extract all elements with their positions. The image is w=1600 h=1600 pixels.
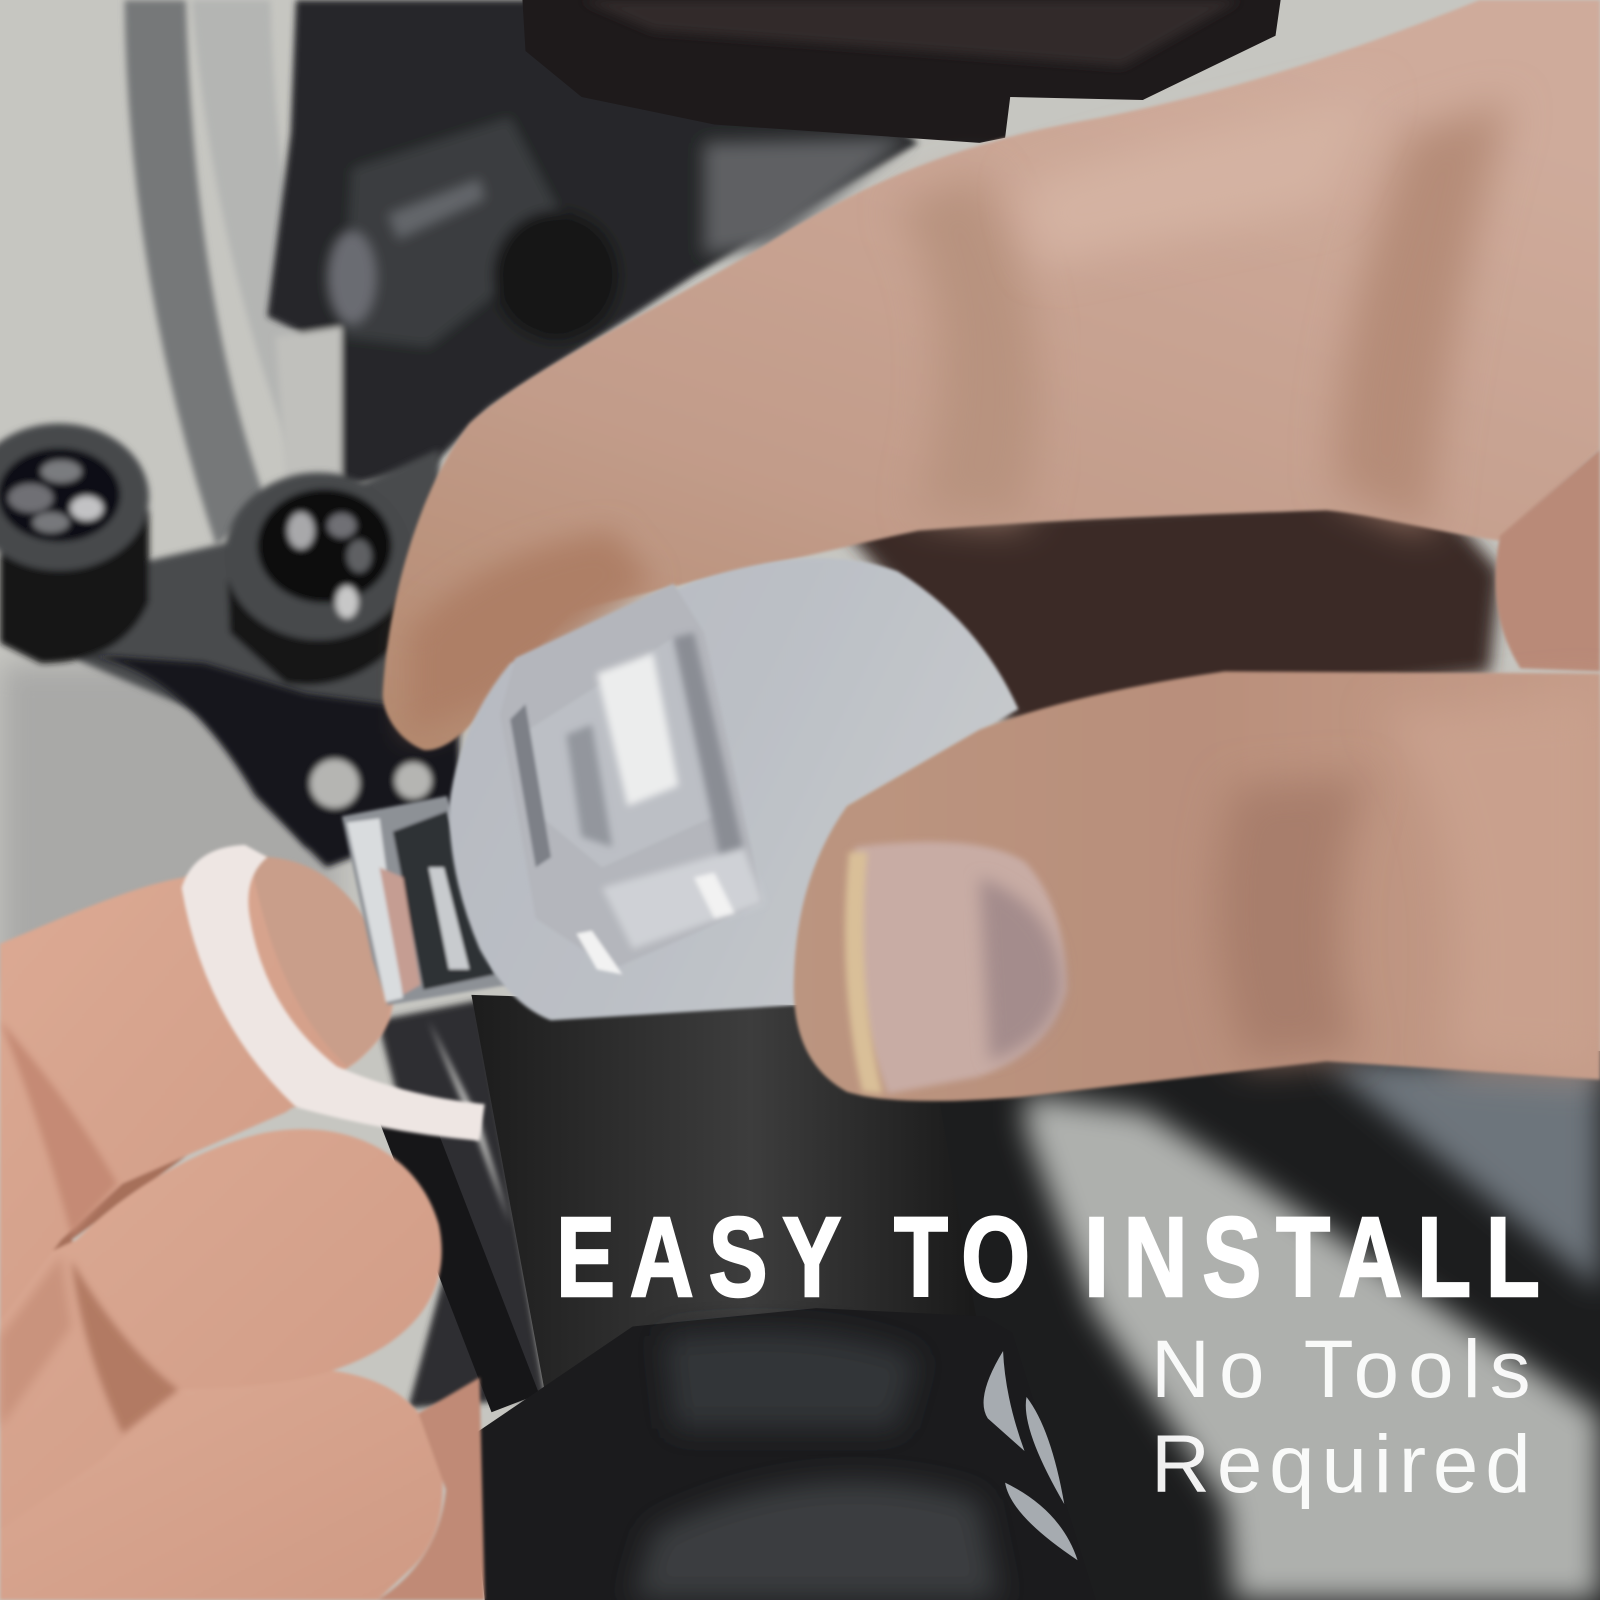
middle finger	[0, 1129, 442, 1531]
index finger	[383, 0, 1600, 750]
subheading: no tools required: Required	[1151, 1419, 1531, 1510]
silicone strap	[182, 845, 485, 1141]
bottom finger	[0, 1369, 443, 1600]
black handlebar tube	[471, 995, 980, 1398]
brake lever assembly	[267, 0, 918, 490]
mount bolts	[0, 423, 449, 847]
dark lower cables	[61, 653, 459, 867]
right bolt	[224, 472, 418, 685]
middle finger behind	[1495, 449, 1600, 671]
subheading: no tools required: No Tools	[1151, 1324, 1531, 1415]
shadowed palm behind the bulb	[837, 490, 1500, 735]
heading: easy to install: EASY TO INSTALL	[556, 1193, 1540, 1320]
bike fork arc	[122, 0, 347, 546]
crease shadow between the fingers	[0, 1020, 306, 1469]
clear tab of the light	[342, 796, 508, 1005]
top finger	[0, 864, 393, 1321]
light body: frosted silicone	[449, 558, 1018, 1020]
thumb	[794, 671, 1600, 1101]
thumbnail	[854, 842, 1066, 1094]
black cable	[403, 1112, 515, 1403]
left hand fingers	[0, 857, 485, 1600]
black device at top	[522, 0, 1281, 143]
subheading: no tools required	[1151, 1324, 1531, 1510]
bar tape	[467, 1308, 1096, 1600]
tape highlights	[984, 1351, 1078, 1560]
clear lens	[500, 584, 763, 974]
left bolt	[0, 423, 149, 663]
